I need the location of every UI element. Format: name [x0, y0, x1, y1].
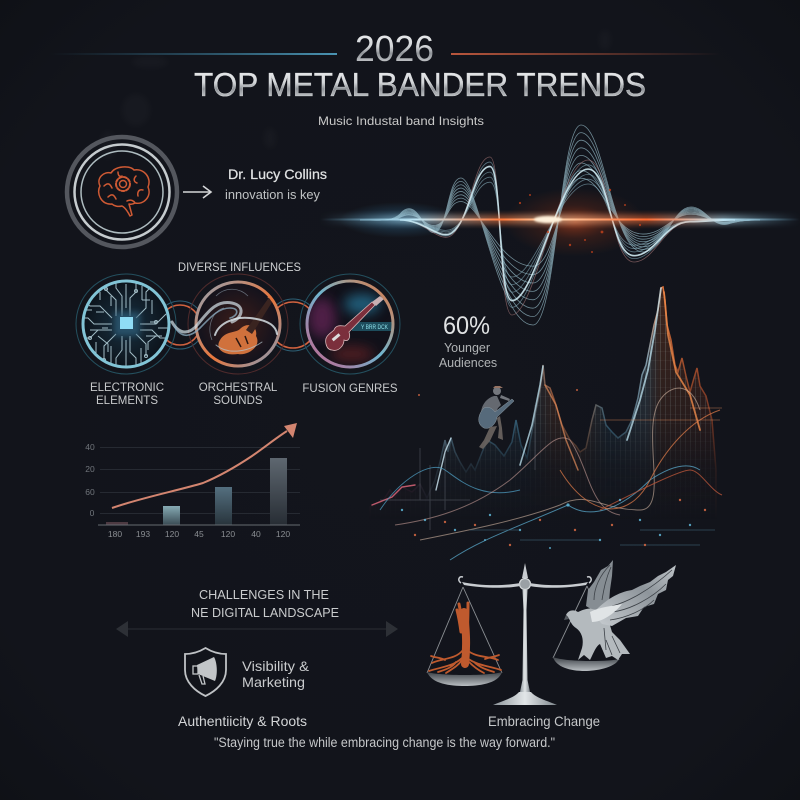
y-axis labels [85, 442, 95, 518]
icon: orchestral violin [172, 274, 288, 374]
text block: visibility and marketing: Visibility & [242, 658, 310, 674]
arrow: growth trend [112, 423, 297, 508]
icon: fusion guitar: Y BRR DCK [361, 325, 388, 331]
x-axis labels: 180 [108, 529, 122, 539]
heading: challenges [191, 587, 339, 620]
label: electronic elements: ELEMENTS [96, 395, 158, 407]
arrow: brain to quote [183, 186, 211, 198]
title: TOP METAL BANDER TRENDS [194, 66, 646, 103]
scale stand [459, 563, 591, 705]
icon: shield with megaphone [185, 648, 226, 696]
label: orchestral sounds: ORCHESTRAL [199, 382, 278, 394]
ridge highlights [372, 288, 700, 505]
x-axis labels [108, 529, 290, 539]
x-axis labels: 120 [165, 529, 179, 539]
label: electronic elements: ELECTRONIC [90, 382, 164, 394]
icon: sound swirl ribbon [172, 303, 277, 351]
icon: link rings [156, 299, 319, 351]
heading: diverse influences: DIVERSE INFLUENCES [178, 260, 301, 274]
chart: data mountains [370, 287, 722, 560]
arrow: double-headed divider [116, 621, 398, 637]
icon: brain in concentric rings [67, 137, 177, 247]
y-axis labels: 60 [85, 487, 95, 497]
dove [564, 560, 676, 660]
chart: sound wave [320, 125, 800, 325]
heading: year with rules: 2026 [355, 28, 434, 69]
text block: visibility and marketing: Marketing [242, 674, 305, 690]
data points [401, 499, 691, 549]
text block: visibility and marketing [242, 658, 310, 690]
data lines [380, 388, 722, 560]
right pan with dove [553, 560, 676, 671]
x-axis labels: 120 [221, 529, 235, 539]
label: fusion genres: FUSION GENRES [302, 383, 398, 395]
quote: "Staying true the while embracing change is the way forward." [214, 735, 555, 750]
y-axis labels: 20 [85, 464, 95, 474]
x-axis labels: 45 [194, 529, 204, 539]
y-axis labels: 0 [90, 508, 95, 518]
label: embracing change: Embracing Change [488, 713, 600, 729]
chart: bar chart with growth arrow [85, 423, 300, 539]
icon: balance scales [427, 560, 676, 705]
stat: 60% younger audiences: Audiences [439, 356, 497, 370]
stat: 60% younger audiences [439, 312, 497, 370]
icon: electronic circuit [76, 274, 176, 374]
y-axis labels: 40 [85, 442, 95, 452]
icon: guitarist climbing [479, 386, 514, 449]
x-axis labels: 120 [276, 529, 290, 539]
bars [106, 458, 287, 525]
label: orchestral sounds [199, 382, 278, 407]
panel: diverse influences circles [76, 274, 400, 374]
text block: Dr. Lucy Collins [225, 166, 327, 202]
label: orchestral sounds: SOUNDS [213, 395, 263, 407]
icon: fusion guitar [300, 274, 400, 374]
label: authenticity and roots: Authentiicity & Roots [178, 713, 307, 729]
heading: challenges: CHALLENGES IN THE [199, 587, 329, 602]
subtitle: Music Industal band Insights [318, 114, 484, 128]
label: electronic elements [90, 382, 164, 407]
stat: 60% younger audiences: Younger [444, 341, 490, 355]
left pan with roots [427, 587, 502, 686]
text block: Dr. Lucy Collins: Dr. Lucy Collins [228, 166, 327, 182]
heading: challenges: NE DIGITAL LANDSCAPE [191, 605, 339, 620]
stat: 60% younger audiences: 60% [443, 312, 490, 340]
x-axis labels: 40 [251, 529, 261, 539]
text block: Dr. Lucy Collins: innovation is key [225, 187, 320, 202]
x-axis labels: 193 [136, 529, 150, 539]
